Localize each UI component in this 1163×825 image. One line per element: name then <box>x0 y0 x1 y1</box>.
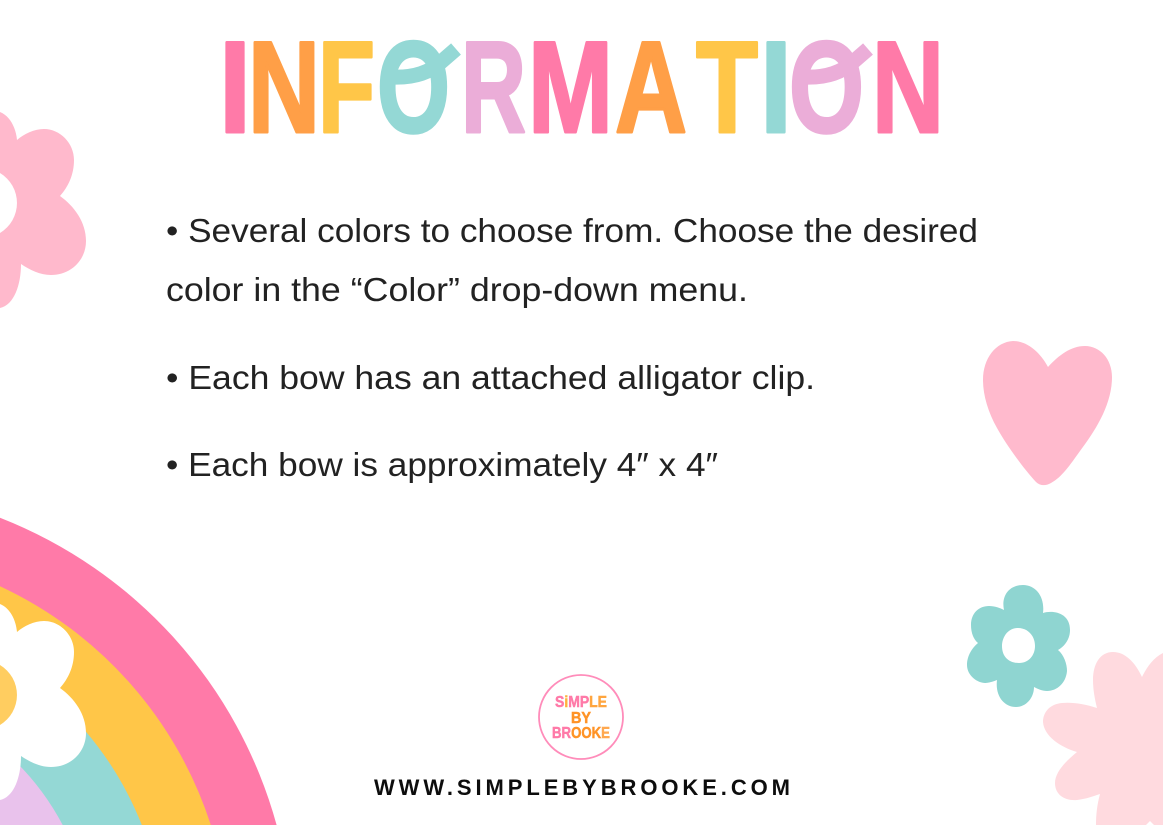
logo badge: SiMPLE <box>555 694 607 711</box>
title: N <box>872 14 944 160</box>
title: F <box>318 14 375 160</box>
logo badge: BY <box>571 710 591 727</box>
title: O <box>789 14 864 160</box>
icon: pink flower left <box>0 112 86 308</box>
title: A <box>615 14 687 160</box>
title <box>219 14 944 160</box>
information bullet list <box>166 212 978 483</box>
title: N <box>248 14 320 160</box>
title: I <box>760 14 792 160</box>
information bullet list: • Several colors to choose from. Choose the desired <box>166 212 978 249</box>
icon: pink heart <box>983 341 1112 485</box>
title: R <box>461 14 526 160</box>
logo badge: BROOKE <box>552 725 610 742</box>
title: O <box>377 14 450 160</box>
icon: white daisy on rainbow <box>0 604 86 800</box>
icon: light pink flower <box>1043 652 1163 825</box>
information bullet list: color in the “Color” drop-down menu. <box>166 271 748 308</box>
rainbow <box>0 518 277 825</box>
icon: teal flower <box>967 585 1070 707</box>
website url: WWW.SIMPLEBYBROOKE.COM <box>374 775 790 800</box>
title: M <box>528 14 613 160</box>
information bullet list: • Each bow has an attached alligator clip. <box>166 359 815 396</box>
logo badge <box>539 675 623 759</box>
information bullet list: • Each bow is approximately 4″ x 4″ <box>166 446 718 483</box>
title: I <box>219 14 251 160</box>
title: T <box>696 14 758 160</box>
